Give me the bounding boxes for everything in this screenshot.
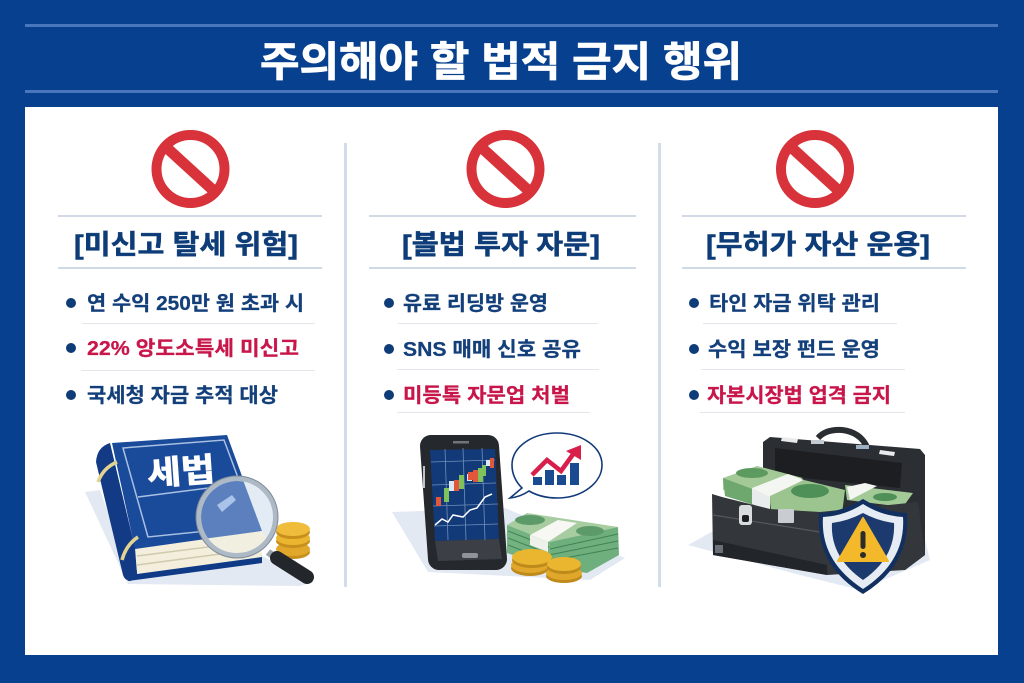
heading: column 2: [볼법 투자 자문] bbox=[402, 230, 600, 260]
icon: smartphone with chart, speech bubble, cash and coins bbox=[392, 433, 625, 583]
warning shield bbox=[819, 499, 907, 594]
candles bbox=[436, 458, 494, 506]
panel: column 1 tax evasion bbox=[58, 135, 322, 586]
list: column 3 bbox=[689, 292, 905, 413]
list: column 1: 연 수익 250만 원 초과 시 bbox=[87, 292, 304, 315]
list: column 2: SNS 매매 신호 공유 bbox=[403, 338, 581, 361]
label: 세법: 세법 bbox=[146, 451, 216, 492]
panel: column 2 illegal advisory bbox=[369, 135, 636, 583]
icon: tax law book with magnifier and coins bbox=[85, 435, 314, 586]
list: column 1: 국세청 자금 추적 대상 bbox=[87, 384, 278, 407]
icon: prohibition sign 1 bbox=[156, 135, 224, 203]
coins bbox=[511, 549, 582, 583]
speech bubble bbox=[510, 433, 602, 498]
list: column 3: 타인 자금 위탁 관리 bbox=[709, 292, 880, 315]
cash stacks bbox=[723, 466, 913, 514]
list: column 2: 유료 리딩방 운영 bbox=[403, 292, 548, 315]
icon: prohibition sign 2 bbox=[472, 135, 540, 203]
list: column 1: 22% 앙도소특세 미신고 bbox=[87, 337, 299, 360]
icon: prohibition sign 3 bbox=[781, 135, 849, 203]
title: 주의해야 할 법적 금지 행위 bbox=[260, 39, 742, 85]
list: column 3: 자본시장법 업격 금지 bbox=[707, 384, 891, 407]
icon: briefcase with cash and warning shield bbox=[688, 430, 930, 594]
panel: main white card bbox=[25, 107, 998, 655]
list: column 3: 수익 보장 펀드 운영 bbox=[708, 338, 880, 361]
heading: column 3: [무허가 자산 운용] bbox=[706, 230, 930, 260]
heading: column 1: [미신고 탈세 위험] bbox=[74, 230, 298, 260]
list: column 2: 미등톡 자문업 처벌 bbox=[403, 384, 570, 407]
list: column 1 bbox=[66, 292, 315, 407]
list: column 2 bbox=[384, 292, 599, 413]
panel: column 3 unlicensed asset management bbox=[682, 135, 966, 594]
